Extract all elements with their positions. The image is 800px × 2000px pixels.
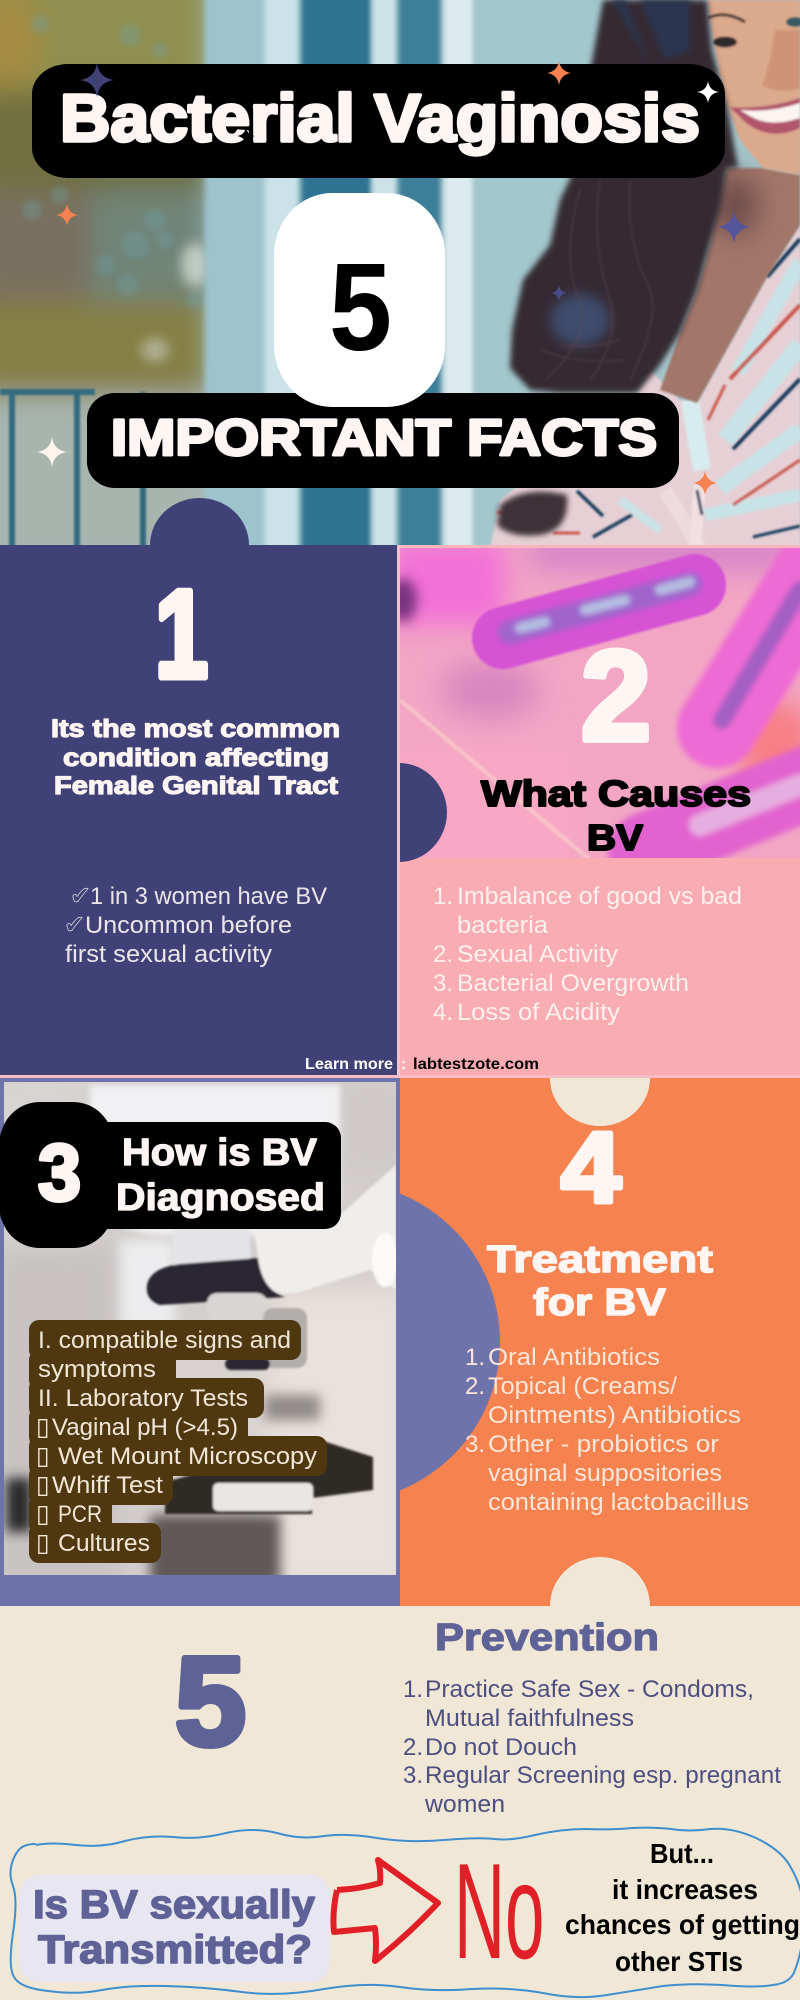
blurred foliage xyxy=(0,0,210,565)
semicircle tab xyxy=(400,763,447,862)
prevention list: Mutual faithfulness xyxy=(425,1705,634,1732)
panel 2 causes list: 2. xyxy=(433,941,453,968)
prevention list: 1. xyxy=(403,1676,423,1703)
panel 2 causes list: 1. xyxy=(433,883,453,910)
prevention list: Do not Douch xyxy=(425,1734,577,1761)
diagnosis list text: Vaginal pH (>4.5) xyxy=(52,1414,238,1441)
wavy hand-drawn outline xyxy=(10,1828,800,1997)
panel 2 causes list: Sexual Activity xyxy=(457,941,618,968)
bacteria photo xyxy=(389,535,800,870)
diagnosis list text: ▯ xyxy=(36,1412,50,1441)
diagnosis list text: Whiff Test xyxy=(52,1472,163,1499)
treatment list: Topical (Creams/ xyxy=(488,1373,677,1400)
panel 1 facts: Uncommon before xyxy=(85,912,292,939)
treatment list: 1. xyxy=(465,1344,485,1371)
hero photo background xyxy=(0,0,800,565)
diagnosis list text: Wet Mount Microscopy xyxy=(58,1443,317,1470)
subtitle banner xyxy=(87,393,679,488)
panel 2: what causes BV xyxy=(389,535,800,1075)
learn more link: Learn more xyxy=(305,1056,393,1073)
question box: Transmitted? xyxy=(38,1928,312,1972)
number 5: 5 xyxy=(175,1631,246,1772)
number and heading badge: Diagnosed xyxy=(116,1177,325,1219)
panel 4 heading: Treatment xyxy=(487,1239,713,1281)
woman: hair xyxy=(497,0,738,536)
pink divider strip xyxy=(0,1075,800,1078)
treatment list: containing lactobacillus xyxy=(488,1489,749,1516)
diagnosis list text: ▯ xyxy=(36,1499,50,1528)
diagnosis list text: I. compatible signs and xyxy=(38,1327,291,1354)
diagnosis list text: ▯ xyxy=(36,1470,50,1499)
panel 1 facts: 1 in 3 women have BV xyxy=(90,883,327,910)
treatment list: 3. xyxy=(465,1431,485,1458)
panel 1 facts xyxy=(64,881,327,968)
panel 1 facts: ✔ xyxy=(64,910,85,939)
prevention list: 3. xyxy=(403,1762,423,1789)
big number 5 badge xyxy=(274,193,445,407)
diagnosis list text: Cultures xyxy=(58,1530,150,1557)
number 4: 4 xyxy=(561,1112,621,1224)
learn more link xyxy=(305,1056,539,1073)
subtitle banner: IMPORTANT FACTS xyxy=(111,409,657,466)
diagnosis list text: symptoms xyxy=(38,1356,156,1383)
microscope photo xyxy=(0,1075,410,1590)
panel 1 heading: condition affecting xyxy=(63,744,329,772)
panel 1: most common condition xyxy=(0,498,400,1075)
treatment list: Other - probiotics or xyxy=(488,1431,719,1458)
question box: Is BV sexually xyxy=(33,1883,316,1927)
woman: neck and chest xyxy=(660,168,800,403)
panel 2 causes list: 3. xyxy=(433,970,453,997)
panel 1 facts: first sexual activity xyxy=(65,941,272,968)
panel 2 heading: What Causes xyxy=(481,773,751,814)
sparkles xyxy=(37,61,750,495)
prevention list: Regular Screening esp. pregnant xyxy=(425,1762,781,1789)
panel 1 heading: Its the most common xyxy=(51,715,340,743)
big number 5 badge: 5 xyxy=(329,239,392,377)
panel 2 causes list xyxy=(433,883,742,1026)
treatment list xyxy=(465,1344,749,1516)
panel 3: how is BV diagnosed xyxy=(0,1075,410,1607)
woman: face xyxy=(707,0,800,175)
diagnosis list text xyxy=(36,1327,317,1557)
panel 2 causes list: Bacterial Overgrowth xyxy=(457,970,689,997)
woman: shirt xyxy=(490,225,800,548)
but it increases chances xyxy=(565,1838,800,1977)
treatment list: 2. xyxy=(465,1373,485,1400)
treatment list: Oral Antibiotics xyxy=(488,1344,660,1371)
panel 2 causes list: Loss of Acidity xyxy=(457,999,620,1026)
number and heading badge: How is BV xyxy=(122,1132,318,1174)
diagnosis list text: ▯ xyxy=(36,1441,50,1470)
number and heading badge xyxy=(0,1102,341,1248)
arrow xyxy=(333,1860,438,1961)
panel 2 causes list: Imbalance of good vs bad xyxy=(457,883,742,910)
panel 2 heading xyxy=(481,773,751,858)
panel 1 heading xyxy=(51,715,340,800)
answer: no: No xyxy=(454,1835,544,1987)
panel 2 causes list: bacteria xyxy=(457,912,549,939)
treatment list: vaginal suppositories xyxy=(488,1460,722,1487)
learn more link: labtestzote.com xyxy=(413,1056,539,1073)
prevention list: 2. xyxy=(403,1734,423,1761)
number and heading badge: 3 xyxy=(38,1128,81,1217)
panel 1 heading: Female Genital Tract xyxy=(54,772,339,800)
title banner: Bacterial Vaginosis xyxy=(60,81,700,156)
panel 4 heading: for BV xyxy=(533,1282,667,1324)
number 2: 2 xyxy=(581,625,651,768)
panel 5: prevention xyxy=(0,1606,800,2000)
panel 2 causes list: 4. xyxy=(433,999,453,1026)
treatment list: Ointments) Antibiotics xyxy=(488,1402,741,1429)
number 1: 1 xyxy=(155,566,208,704)
but it increases chances: other STIs xyxy=(615,1946,743,1977)
callout: is BV sexually transmitted xyxy=(10,1828,800,1997)
pink lower block xyxy=(400,858,800,1075)
title banner xyxy=(32,64,725,178)
panel 4 heading xyxy=(487,1239,713,1324)
but it increases chances: it increases xyxy=(612,1874,758,1905)
diagnosis list text: PCR xyxy=(58,1501,102,1528)
panel 4: treatment for BV xyxy=(400,1078,800,1606)
panel 1 facts: ✔ xyxy=(70,881,91,910)
prevention list xyxy=(403,1676,781,1818)
decorative tabs xyxy=(400,1078,650,1606)
prevention list: women xyxy=(424,1791,505,1818)
prevention list: Practice Safe Sex - Condoms, xyxy=(425,1676,754,1703)
diagnosis list text: ▯ xyxy=(36,1528,50,1557)
diagnosis list text: II. Laboratory Tests xyxy=(38,1385,248,1412)
diagnosis list highlights xyxy=(29,1320,327,1563)
panel 2 heading: BV xyxy=(587,817,643,858)
but it increases chances: But... xyxy=(650,1838,714,1869)
question box xyxy=(19,1875,330,1982)
prevention heading: Prevention xyxy=(435,1617,659,1659)
learn more link: : xyxy=(401,1056,406,1073)
